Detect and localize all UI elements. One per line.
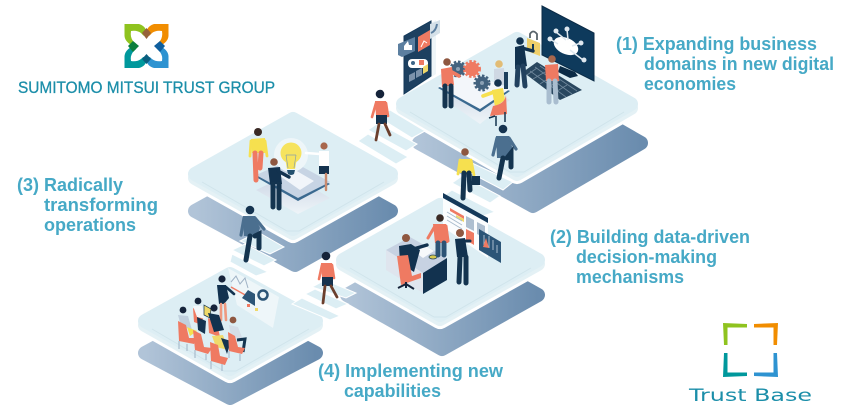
panel: platform 1 digital economies <box>403 39 641 206</box>
person: man in dark sweater at tablet <box>268 158 289 208</box>
caption 4: (4) Implementing new <box>318 361 504 381</box>
caption 2: decision-making <box>576 247 717 267</box>
caption 4 <box>318 361 504 401</box>
person: blonde woman at table <box>494 60 508 89</box>
caption 1 <box>616 34 834 94</box>
caption 1: domains in new digital <box>644 54 834 74</box>
person: man in coral at monitor <box>545 55 559 102</box>
illustration: keyboard <box>523 62 582 100</box>
front row seats <box>178 321 197 344</box>
stairs between platforms <box>230 110 513 320</box>
caption 3 <box>17 175 158 235</box>
logo: Trust Base <box>688 323 812 405</box>
seated people back <box>195 298 201 304</box>
caption 2: mechanisms <box>576 267 684 287</box>
illustration: presentation board and chart <box>443 193 501 263</box>
person: woman walking between platforms <box>319 252 337 303</box>
person: man in yellow and coral <box>250 128 267 180</box>
person: man climbing to platform 3 <box>241 206 264 260</box>
person: presenter <box>217 275 234 320</box>
person: seated man in yellow with chair <box>483 79 507 126</box>
audience on coral chairs <box>178 298 245 371</box>
person: man in yellow with briefcase <box>458 148 480 198</box>
person: seated man with coral chair <box>397 234 427 289</box>
person: woman in white <box>306 142 329 190</box>
person: man climbing to platform 1 <box>493 125 516 178</box>
caption 1: (1) Expanding business <box>616 34 817 54</box>
illustration: meeting table with gears <box>438 62 510 124</box>
person: man in coral at table <box>441 58 459 106</box>
caption 2 <box>550 227 750 287</box>
illustration: monitor with cloud network <box>542 6 594 81</box>
caption 4: capabilities <box>344 381 441 401</box>
panel: platform 3 transforming operations <box>195 119 391 265</box>
caption 3: (3) Radically <box>17 175 123 195</box>
person: man at padlock <box>515 37 533 86</box>
seated people front <box>180 307 186 313</box>
logo wordmark: SUMITOMO MITSUI TRUST GROUP <box>18 78 275 97</box>
caption 3: operations <box>44 215 136 235</box>
caption 2: (2) Building data-driven <box>550 227 750 247</box>
panel: platform 2 data-driven decisions <box>343 205 538 349</box>
illustration: classroom board <box>228 268 279 328</box>
person: man in coral at desk <box>428 214 448 255</box>
illustration: desk <box>386 237 447 294</box>
logo: Sumitomo Mitsui Trust Group <box>18 24 275 97</box>
icon: four brackets <box>723 323 778 377</box>
illustration: light bulb on tablet <box>256 138 330 214</box>
person: woman walking on stairs <box>372 90 390 140</box>
illustration: padlock <box>527 32 540 56</box>
icon: flower mark <box>124 24 168 68</box>
panel: platform 4 new capabilities <box>145 274 316 398</box>
back row seats <box>193 308 204 326</box>
person: woman at board <box>455 229 470 283</box>
illustration: phone with social icons <box>398 20 440 94</box>
caption 1: economies <box>644 74 736 94</box>
caption 3: transforming <box>44 195 158 215</box>
